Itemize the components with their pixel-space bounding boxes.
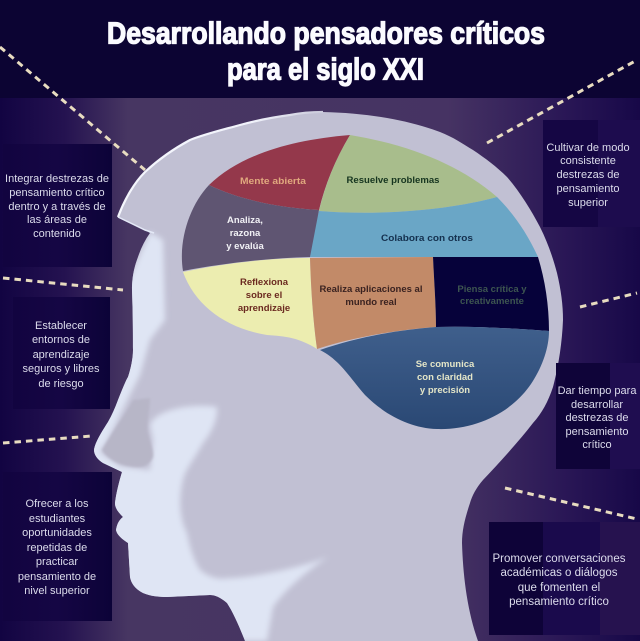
brain section: Colabora con otros <box>310 197 538 257</box>
label: Se comunica: y precisión <box>420 385 470 396</box>
text box: Dar tiempo: destrezas de <box>566 412 628 424</box>
text box: Ofrecer oportunidades: pensamiento de <box>18 571 96 583</box>
label: Realiza aplicaciones: mundo real <box>345 297 397 308</box>
title: Desarrollando pensadores críticos <box>107 16 545 50</box>
text box: Establecer entornos: Establecer <box>35 320 87 332</box>
text box: Cultivar de modo: superior <box>568 197 608 209</box>
text box: Cultivar de modo: Cultivar de modo <box>546 142 630 154</box>
label: Analiza: Analiza, <box>227 215 263 226</box>
text box: Dar tiempo: Dar tiempo para <box>558 385 637 397</box>
text box: Promover conversaciones <box>489 522 640 635</box>
label: Piensa critica: Piensa crítica y <box>457 284 527 295</box>
label: Se comunica: Se comunica <box>416 359 475 370</box>
text box: Cultivar de modo <box>543 120 640 227</box>
label: Reflexiona: aprendizaje <box>238 303 290 314</box>
nose shadow <box>102 398 153 467</box>
label: Analiza: y evalúa <box>226 241 264 252</box>
label: Mente abierta: Mente abierta <box>240 176 307 187</box>
text box: Integrar destrezas <box>3 144 112 267</box>
label: Se comunica <box>416 359 475 396</box>
text box: Promover conversaciones: que fomenten el <box>518 582 600 594</box>
title: para el siglo XXI <box>227 52 424 86</box>
brain <box>182 135 549 429</box>
text box: Cultivar de modo: pensamiento <box>556 183 620 195</box>
text box: Dar tiempo: crítico <box>582 439 612 451</box>
brain section: Mente abierta <box>209 135 350 210</box>
brain section: Realiza aplicaciones <box>310 257 436 349</box>
skull rim <box>118 112 323 217</box>
text box: Ofrecer oportunidades: Ofrecer a los <box>26 498 89 510</box>
text box: Establecer entornos: de riesgo <box>38 378 84 390</box>
text box: Dar tiempo: pensamiento <box>566 426 628 438</box>
text box: Promover conversaciones: académicas o diálogos <box>500 567 618 579</box>
text box: Promover conversaciones: pensamiento crítico <box>509 596 609 608</box>
label: Piensa critica: creativamente <box>460 296 524 307</box>
label: Colabora con otros: Colabora con otros <box>381 233 473 244</box>
text box: Integrar destrezas: Integrar destrezas de <box>5 173 109 185</box>
label: Analiza <box>226 215 264 252</box>
text box: Integrar destrezas: las áreas de <box>27 214 87 226</box>
brain section: Reflexiona <box>183 258 317 349</box>
text box: Establecer entornos <box>13 297 110 409</box>
label: Resuelve problemas: Resuelve problemas <box>346 175 440 186</box>
label: Realiza aplicaciones: Realiza aplicaciones al <box>320 284 422 295</box>
text box: Ofrecer oportunidades: repetidas de <box>27 542 87 554</box>
brow underside <box>118 217 154 233</box>
dashed connector lines <box>0 47 637 519</box>
text box: Establecer entornos: aprendizaje <box>33 349 89 361</box>
text box: Integrar destrezas: pensamiento crítico <box>9 187 105 199</box>
text box: Cultivar de modo: consistente <box>560 155 616 167</box>
label: Reflexiona: Reflexiona <box>240 277 289 288</box>
text box: Integrar destrezas: contenido <box>33 228 81 240</box>
text box: Establecer entornos: entornos de <box>32 334 90 346</box>
brain labels <box>226 175 527 396</box>
brain section: Piensa critica <box>433 257 549 331</box>
text box: Ofrecer oportunidades <box>3 472 112 621</box>
head silhouette <box>90 112 563 641</box>
text box: Ofrecer oportunidades: nivel superior <box>24 585 90 597</box>
text box: Ofrecer oportunidades: practicar <box>36 556 78 568</box>
label: Piensa critica <box>457 284 527 307</box>
label: Realiza aplicaciones <box>320 284 422 308</box>
label: Se comunica: con claridad <box>417 372 473 383</box>
title <box>107 16 545 86</box>
label: Reflexiona <box>238 277 290 314</box>
label: Reflexiona: sobre el <box>246 290 282 301</box>
text box: Cultivar de modo: destrezas de <box>557 169 619 181</box>
brain section: Se comunica <box>320 327 549 429</box>
text box: Ofrecer oportunidades: estudiantes <box>29 513 86 525</box>
brain section: Analiza, razona y evalua <box>182 185 319 271</box>
text box: Establecer entornos: seguros y libres <box>22 363 100 375</box>
brain section: Resuelve problemas <box>319 135 497 213</box>
text box: Dar tiempo: desarrollar <box>571 399 623 411</box>
label: Analiza: razona <box>230 228 261 239</box>
face highlight <box>90 232 328 641</box>
text box: Dar tiempo <box>556 363 640 469</box>
text box: Ofrecer oportunidades: oportunidades <box>22 527 92 539</box>
text box: Promover conversaciones: Promover conversaciones <box>493 553 626 565</box>
text box: Integrar destrezas: dentro y a través de <box>8 201 106 213</box>
